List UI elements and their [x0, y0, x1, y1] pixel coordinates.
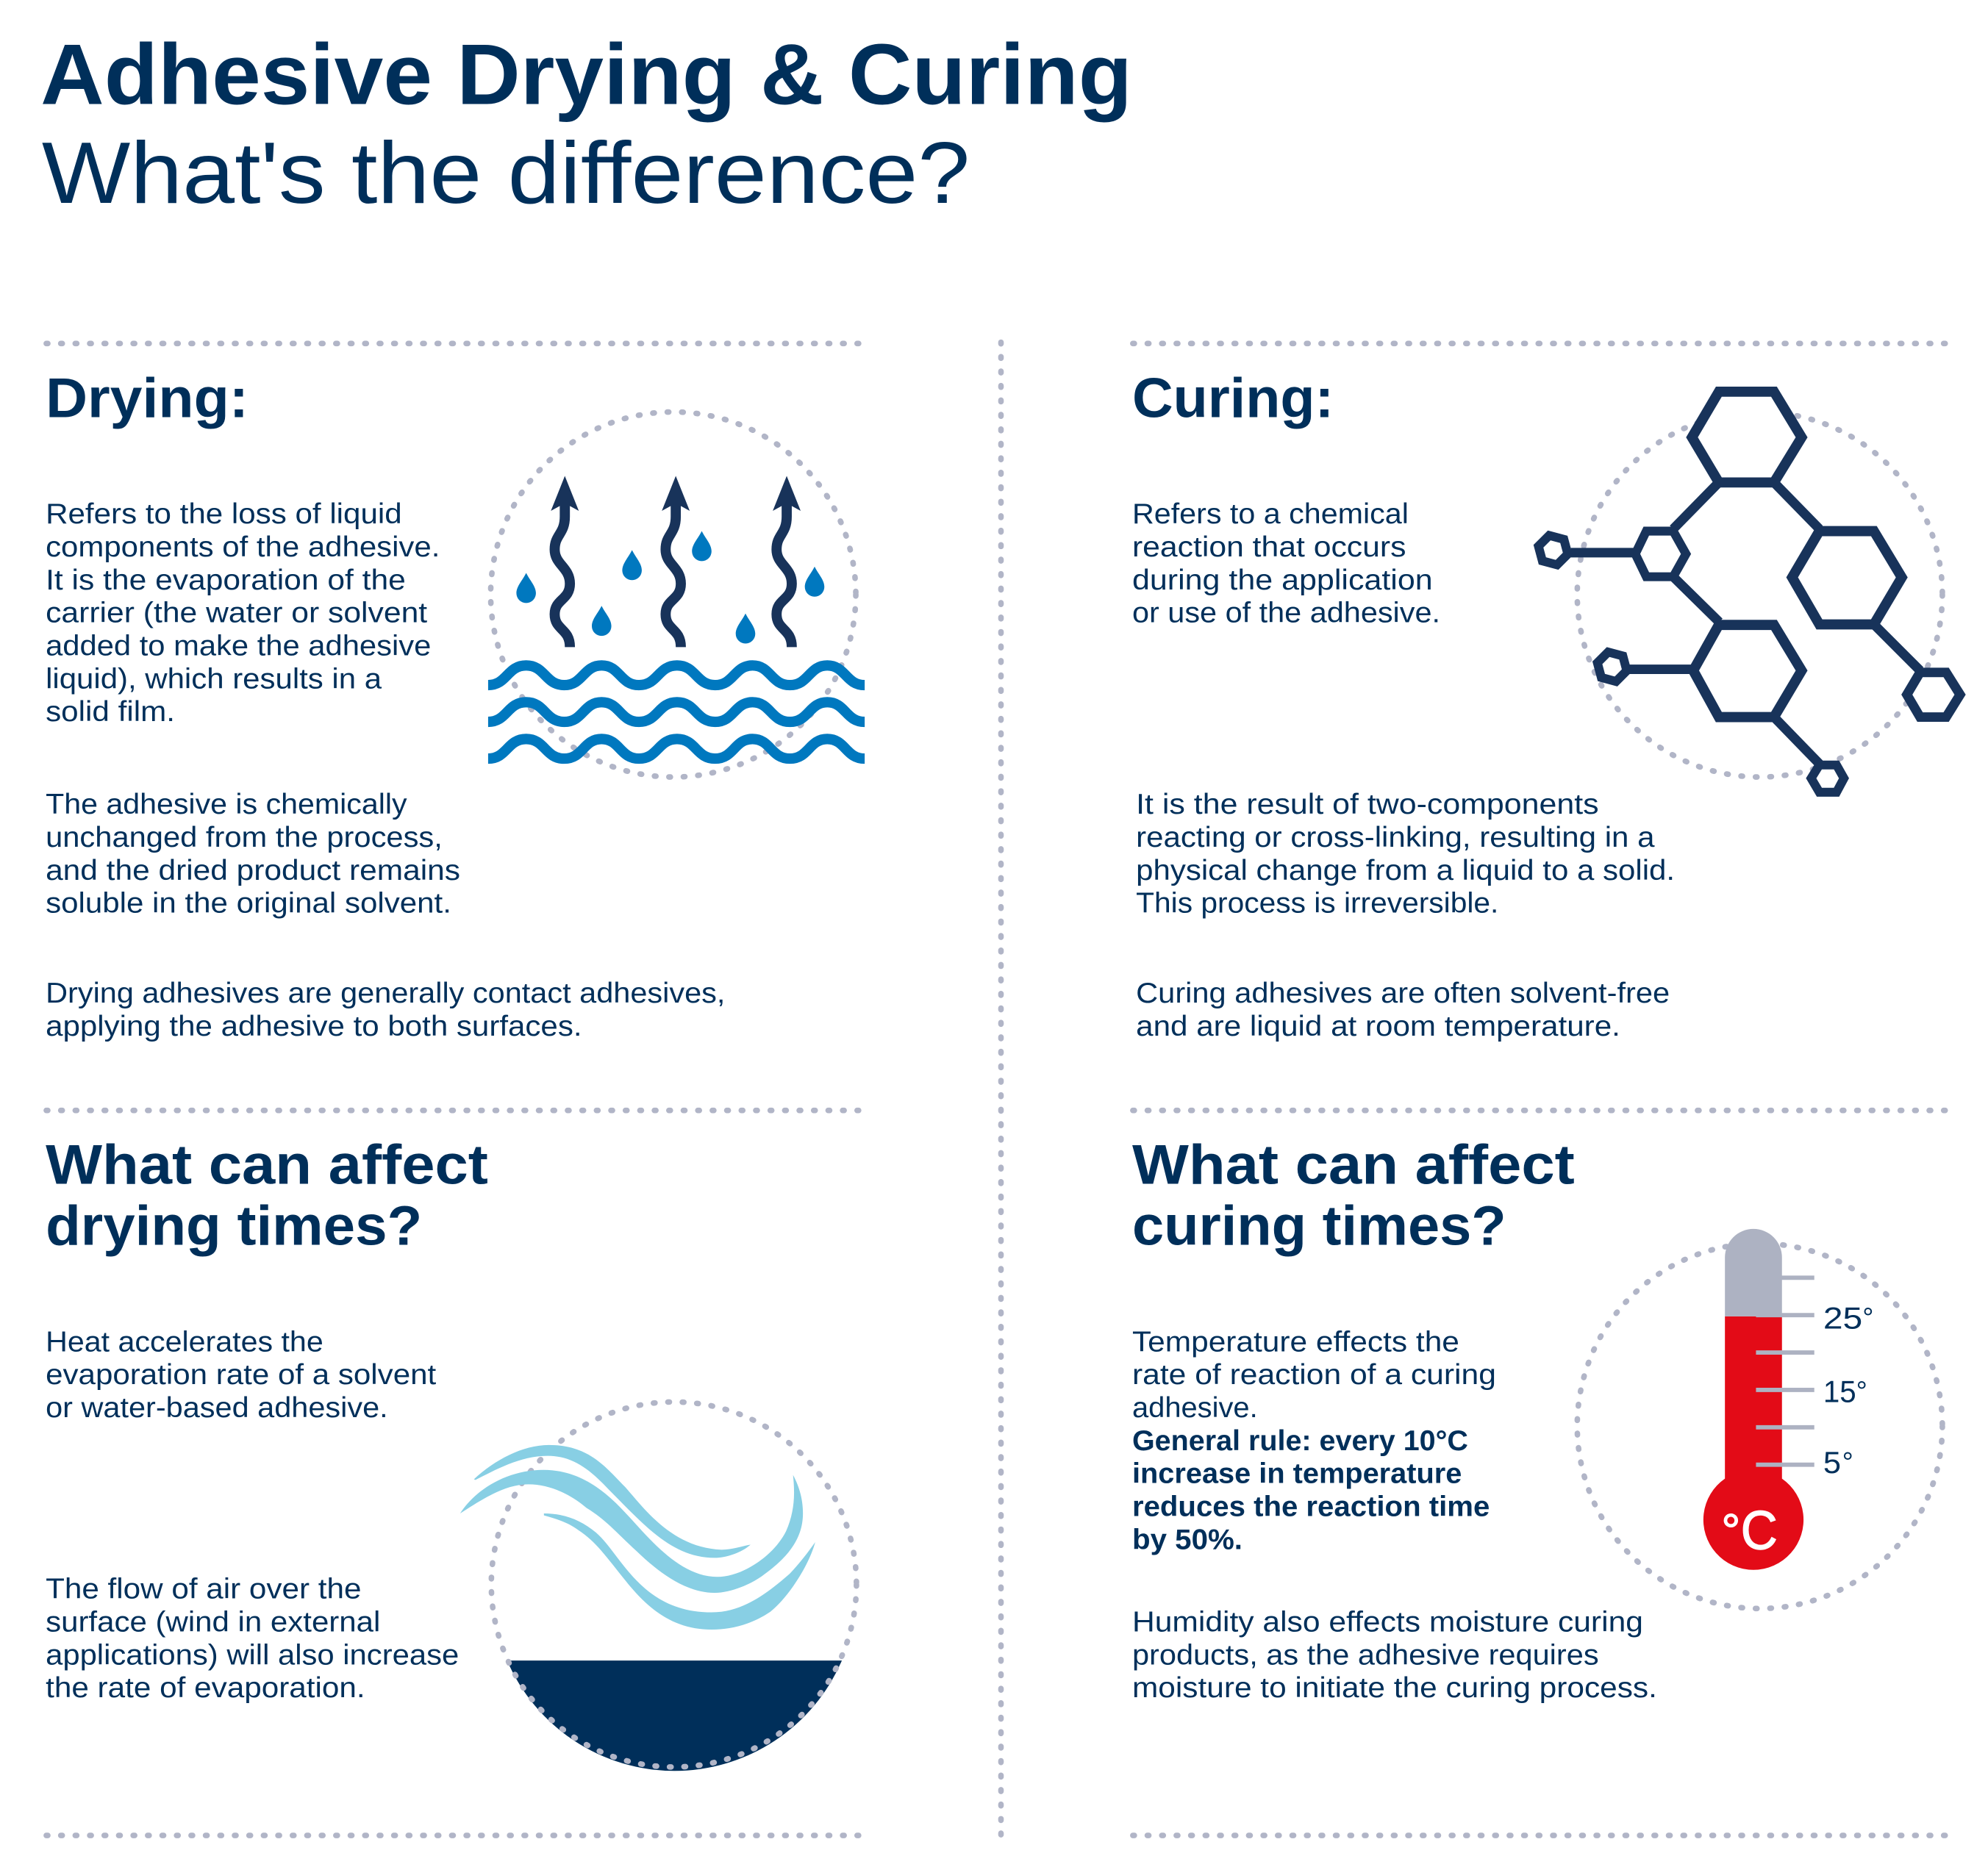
text: two components: This process is irreversible. — [1136, 888, 1498, 920]
icon: evaporation — [488, 412, 865, 777]
text: chemically unchanged — [46, 789, 460, 920]
heading: what can affect drying times: drying times? — [46, 1194, 422, 1257]
wind streams — [460, 1445, 815, 1630]
text: humidity: moisture to initiate the curing process. — [1132, 1672, 1657, 1704]
text: chemically unchanged: and the dried product remains — [46, 855, 460, 886]
text: curing definition: during the application — [1132, 565, 1433, 596]
thermometer scale — [1756, 1277, 1814, 1465]
text: humidity — [1132, 1606, 1657, 1704]
heading: what can affect curing times: What can affect — [1132, 1134, 1575, 1197]
text: humidity: products, as the adhesive requires — [1132, 1639, 1599, 1671]
thermometer body — [1703, 1229, 1803, 1570]
title: What's the difference? — [42, 124, 970, 222]
heading: what can affect curing times — [1132, 1134, 1575, 1257]
text: two components: physical change from a liquid to a solid. — [1136, 855, 1675, 886]
text: two components: reacting or cross-linking, resulting in a — [1136, 822, 1655, 853]
heading: what can affect drying times — [46, 1134, 488, 1257]
text: contact adhesives: Drying adhesives are generally contact adhesives, — [46, 978, 725, 1009]
text: heat: or water-based adhesive. — [46, 1392, 388, 1424]
heading: drying: Drying: — [46, 367, 248, 429]
text: solvent-free: Curing adhesives are often solvent-free — [1136, 978, 1670, 1009]
title: Adhesive Drying & Curing — [40, 26, 1132, 122]
text: two components — [1136, 789, 1675, 920]
text: drying definition: It is the evaporation of the — [46, 565, 406, 596]
text: air flow: surface (wind in external — [46, 1606, 380, 1638]
surface — [507, 1660, 842, 1771]
text: contact adhesives — [46, 978, 725, 1042]
text: curing definition — [1132, 498, 1440, 629]
molecule bonds — [1571, 482, 1920, 764]
panel: affecting curing times — [1132, 1134, 1942, 1704]
unit label — [1722, 1499, 1778, 1560]
text: drying definition: components of the adhesive. — [46, 531, 440, 563]
icon: wind over surface — [460, 1402, 857, 1771]
text: curing definition: reaction that occurs — [1132, 531, 1406, 563]
text: drying definition — [46, 498, 440, 728]
text: drying definition: Refers to the loss of liquid — [46, 498, 402, 530]
scale labels: 5 — [1823, 1446, 1841, 1480]
text: general rule — [1132, 1425, 1490, 1555]
icon: molecule — [1535, 392, 1960, 792]
text: general rule: General rule: every 10°C — [1132, 1425, 1468, 1457]
molecule rings — [1535, 392, 1960, 792]
text: heat: evaporation rate of a solvent — [46, 1359, 436, 1391]
panel: curing — [1132, 367, 1960, 1042]
scale labels: ° — [1842, 1447, 1853, 1478]
icon: rising arrows — [551, 476, 801, 647]
panel: drying — [46, 367, 865, 1042]
scale labels: 15 — [1823, 1375, 1856, 1408]
text: heat — [46, 1326, 436, 1424]
unit label: ° — [1722, 1505, 1740, 1555]
heading: what can affect curing times: curing times? — [1132, 1194, 1506, 1257]
text: curing definition: Refers to a chemical — [1132, 498, 1409, 530]
text: general rule: reduces the reaction time — [1132, 1491, 1490, 1522]
text: air flow: the rate of evaporation. — [46, 1672, 365, 1704]
text: temperature: adhesive. — [1132, 1392, 1258, 1424]
text: two components: It is the result of two-components — [1136, 789, 1599, 820]
text: drying definition: carrier (the water or solvent — [46, 598, 427, 629]
text: humidity: Humidity also effects moisture curing — [1132, 1606, 1643, 1638]
text: heat: Heat accelerates the — [46, 1326, 323, 1358]
text: general rule: increase in temperature — [1132, 1458, 1462, 1490]
text: chemically unchanged: soluble in the original solvent. — [46, 888, 451, 920]
heading: what can affect drying times: What can affect — [46, 1134, 488, 1197]
text: solvent-free — [1136, 978, 1670, 1042]
text: curing definition: or use of the adhesive. — [1132, 598, 1440, 629]
text: drying definition: added to make the adhesive — [46, 631, 431, 662]
scale labels: ° — [1856, 1377, 1867, 1408]
text: air flow — [46, 1574, 459, 1704]
text: temperature: Temperature effects the — [1132, 1326, 1459, 1358]
heading: curing: Curing: — [1132, 367, 1334, 429]
text: temperature — [1132, 1326, 1496, 1424]
text: temperature: rate of reaction of a curing — [1132, 1359, 1496, 1391]
scale labels — [1823, 1301, 1873, 1480]
text: contact adhesives: applying the adhesive to both surfaces. — [46, 1011, 582, 1042]
text: drying definition: solid film. — [46, 696, 175, 728]
panel: affecting drying times — [46, 1134, 857, 1771]
text: chemically unchanged: The adhesive is chemically — [46, 789, 407, 820]
text: chemically unchanged: unchanged from the process, — [46, 822, 443, 853]
text: drying definition: liquid), which results in a — [46, 663, 382, 695]
icon: water waves — [488, 665, 865, 759]
icon: water drops — [516, 531, 824, 644]
unit label: C — [1741, 1499, 1778, 1560]
text: solvent-free: and are liquid at room temperature. — [1136, 1011, 1620, 1042]
title — [40, 26, 1132, 222]
text: air flow: applications) will also increase — [46, 1639, 459, 1671]
text: air flow: The flow of air over the — [46, 1574, 361, 1605]
scale labels: ° — [1862, 1303, 1873, 1334]
text: general rule: by 50%. — [1132, 1524, 1242, 1555]
icon: thermometer — [1577, 1229, 1942, 1608]
scale labels: 25 — [1823, 1301, 1862, 1335]
